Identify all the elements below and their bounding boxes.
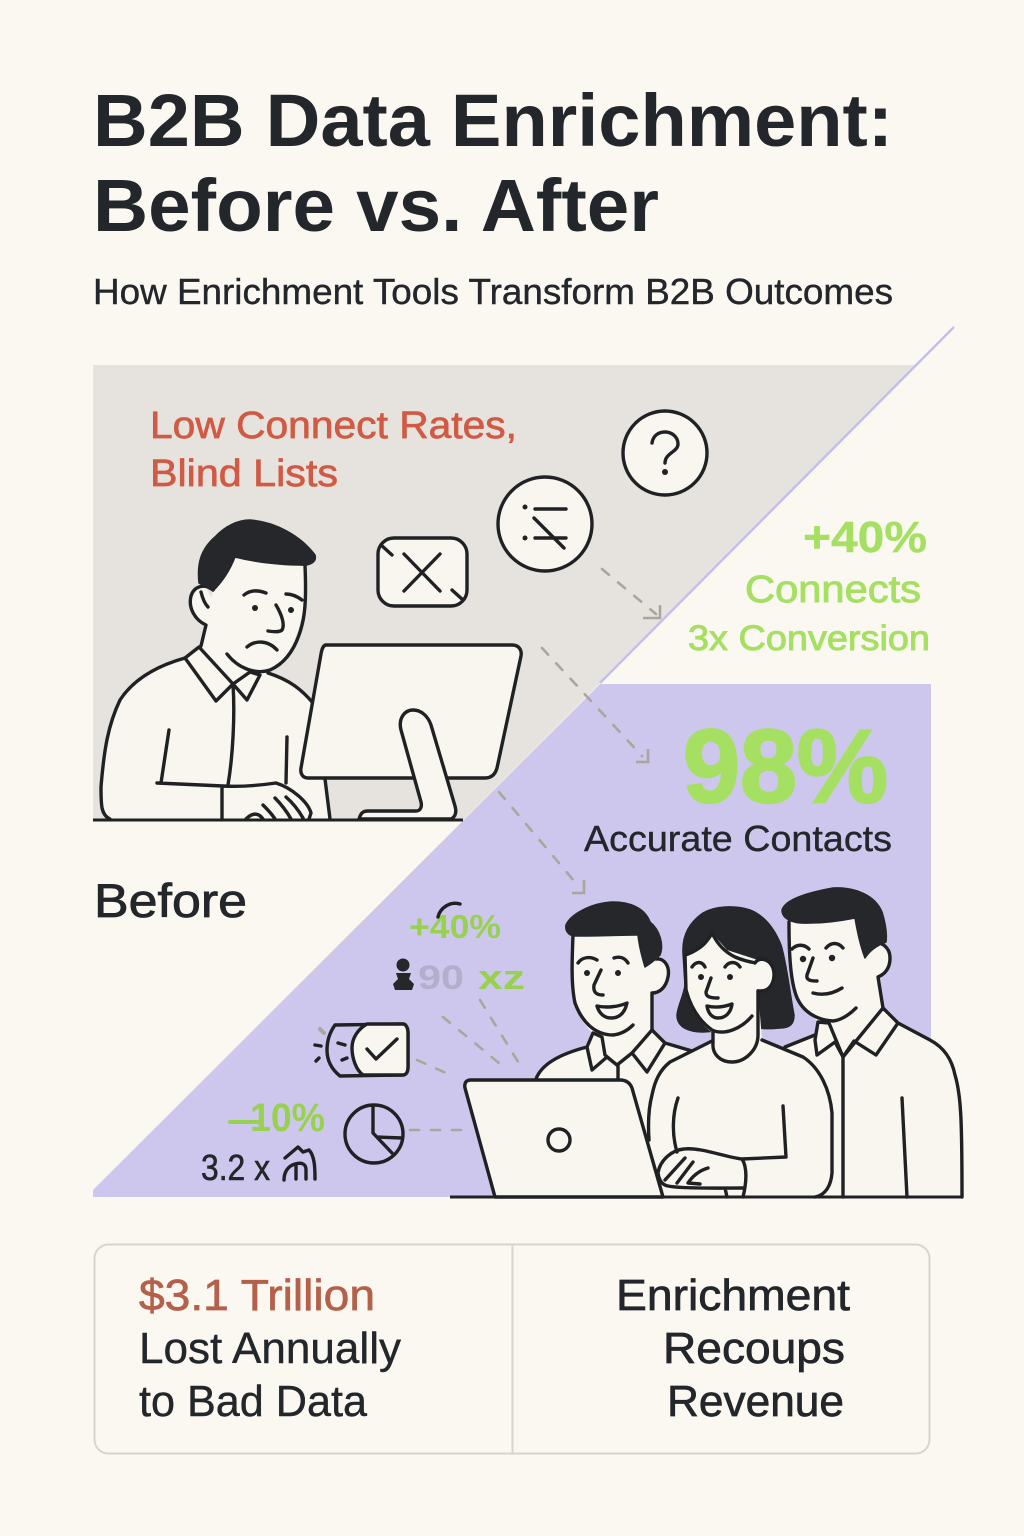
stat: 98% accurate contacts [584, 709, 892, 859]
text: enrichment recoups revenue: Recoups [663, 1324, 845, 1373]
stat: +40% connects and 3x conversion: 3x Conversion [688, 619, 930, 658]
text: $3.1 trillion lost: $3.1 Trillion [139, 1271, 375, 1320]
desk line [450, 1196, 963, 1198]
arrow: bubbles to after [602, 569, 660, 618]
title: Before vs. After [93, 164, 659, 247]
stat: 98% accurate contacts: Accurate Contacts [584, 818, 892, 859]
text: $3.1 trillion lost: Lost Annually [139, 1324, 401, 1373]
heading: low connect rates: Blind Lists [150, 453, 338, 495]
heading: low connect rates: Low Connect Rates, [150, 405, 517, 447]
text: $3.1 trillion lost: to Bad Data [139, 1377, 368, 1426]
person: right man [780, 888, 962, 1197]
garbled label: 90 [418, 959, 464, 997]
heading: low connect rates [150, 405, 517, 495]
arrow: monitor to accuracy [542, 648, 648, 762]
icon: contact person [393, 958, 414, 990]
text: enrichment recoups revenue [616, 1271, 850, 1426]
small stat: +40%: +40% [409, 908, 501, 945]
title: B2B Data Enrichment: [93, 79, 893, 162]
text: $3.1 trillion lost [139, 1271, 401, 1426]
panel: before background [93, 365, 918, 820]
garbled label [418, 959, 525, 997]
illustration: frustrated man at monitor [93, 520, 521, 820]
connectors: icons to laptop [410, 1000, 523, 1130]
small stat: -10%: 10% [250, 1096, 325, 1140]
icon: pie chart [345, 1105, 403, 1163]
small stat: 3.2 x: 3.2 x [201, 1147, 270, 1188]
panel: after background [93, 684, 931, 1197]
text: enrichment recoups revenue: Revenue [667, 1377, 844, 1426]
subtitle: How Enrichment Tools Transform B2B Outcomes [93, 271, 893, 312]
diagonal divider [600, 327, 954, 683]
label: before: Before [94, 874, 247, 927]
stat: +40% connects and 3x conversion: +40% [803, 513, 927, 562]
icon: failed email [378, 538, 467, 606]
person: woman [648, 907, 832, 1197]
stat: +40% connects and 3x conversion: Connects [745, 569, 921, 611]
icon: verified check [315, 1024, 408, 1076]
stat: +40% connects and 3x conversion [688, 513, 930, 658]
icon: question mark bubble [623, 411, 707, 495]
panel: bottom summary [94, 1244, 930, 1454]
text: enrichment recoups revenue: Enrichment [616, 1271, 850, 1320]
stat: 98% accurate contacts: 98% [683, 709, 888, 825]
illustration: smiling team at laptop [450, 888, 963, 1197]
device: laptop [465, 1080, 663, 1197]
person: left man [536, 902, 692, 1197]
garbled label: xz [478, 959, 525, 997]
small stat: 3.2 x [201, 1147, 315, 1188]
title [93, 79, 893, 247]
arrow: accuracy to team [499, 792, 584, 893]
icon: broken list bubble [498, 477, 592, 571]
